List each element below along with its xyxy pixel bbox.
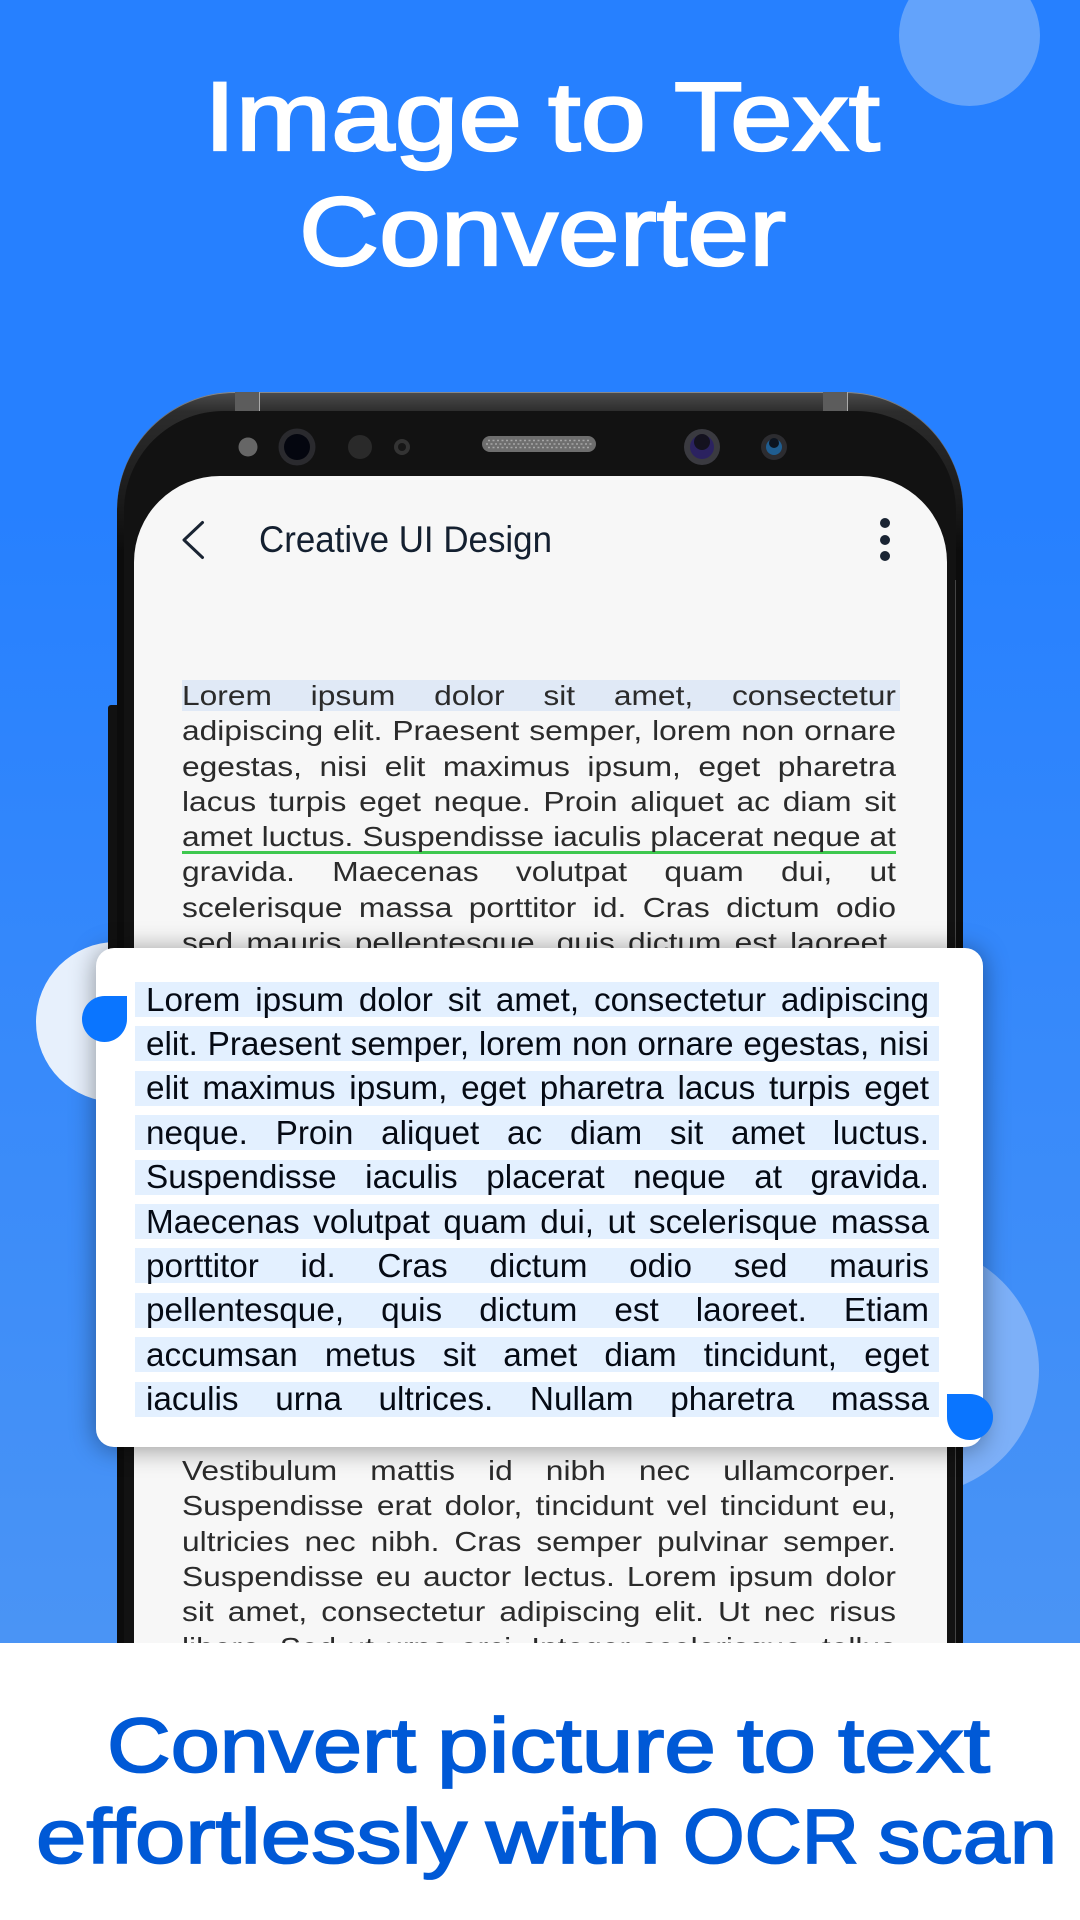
document text lower: libero. Sed ut urna orci. Integer scelerisque, tellus bbox=[182, 1632, 896, 1662]
extracted text: pellentesque, quis dictum est laoreet. Etiam bbox=[146, 1292, 929, 1329]
selection handle: bottom right bbox=[947, 1394, 993, 1440]
decorative circle: right behind card bbox=[789, 1245, 1039, 1495]
document text upper: gravida. Maecenas volutpat quam dui, ut bbox=[182, 856, 896, 887]
extracted text: accumsan metus sit amet diam tincidunt, eget bbox=[146, 1337, 929, 1374]
bottom caption: text bbox=[838, 1703, 990, 1789]
phone side button bbox=[108, 705, 122, 1005]
phone body bbox=[117, 392, 963, 1792]
document text upper: scelerisque massa porttitor id. Cras dictum odio bbox=[182, 892, 896, 922]
phone edge highlights bbox=[235, 392, 260, 412]
bottom caption: with bbox=[485, 1794, 661, 1880]
extracted text bbox=[146, 982, 929, 1418]
back chevron icon bbox=[182, 520, 204, 560]
title bbox=[204, 62, 880, 286]
document text upper: Lorem ipsum dolor sit amet, consectetur bbox=[182, 680, 896, 711]
bottom caption: scan bbox=[878, 1794, 1057, 1880]
document text upper: amet luctus. Suspendisse iaculis placerat neque at bbox=[182, 821, 896, 852]
bottom caption bbox=[36, 1703, 1057, 1880]
extracted text: iaculis urna ultrices. Nullam pharetra massa bbox=[146, 1381, 929, 1418]
document text upper: lacus turpis eget neque. Proin aliquet ac diam sit bbox=[182, 786, 896, 817]
extracted text: porttitor id. Cras dictum odio sed mauris bbox=[146, 1248, 929, 1285]
document text lower: Vestibulum mattis id nibh nec ullamcorper. bbox=[182, 1455, 896, 1486]
extracted text: Maecenas volutpat quam dui, ut scelerisque massa bbox=[146, 1204, 929, 1240]
document text upper: egestas, nisi elit maximus ipsum, eget pharetra bbox=[182, 751, 896, 782]
bottom caption: Convert bbox=[107, 1703, 416, 1789]
document text lower: Suspendisse erat dolor, tincidunt vel tincidunt eu, bbox=[182, 1490, 896, 1521]
decorative circle: top right bbox=[899, 0, 1040, 106]
more menu icon bbox=[880, 518, 890, 561]
camera sensors and speaker bbox=[238, 428, 787, 466]
bottom white band bbox=[0, 1643, 1080, 1920]
document text upper: sed mauris pellentesque, quis dictum est laoreet. bbox=[182, 927, 896, 958]
extracted text: elit. Praesent semper, lorem non ornare egestas, nisi bbox=[146, 1026, 929, 1063]
extracted text: Lorem ipsum dolor sit amet, consectetur adipiscing bbox=[146, 982, 929, 1018]
title: Text bbox=[674, 62, 880, 171]
selected line highlight bbox=[182, 680, 900, 711]
app bar title: Creative UI Design bbox=[259, 519, 552, 560]
extracted text: elit maximus ipsum, eget pharetra lacus turpis eget bbox=[146, 1070, 929, 1107]
document text lower bbox=[182, 1455, 896, 1662]
document text upper: adipiscing elit. Praesent semper, lorem non ornare bbox=[182, 715, 896, 746]
phone inner bezel bbox=[124, 411, 956, 1711]
extracted text: Suspendisse iaculis placerat neque at gravida. bbox=[146, 1159, 929, 1196]
bottom caption: picture bbox=[437, 1703, 716, 1789]
extracted text: neque. Proin aliquet ac diam sit amet luctus. bbox=[146, 1115, 929, 1152]
title: to bbox=[548, 62, 646, 171]
phone screen bbox=[134, 476, 947, 1776]
document text lower: sit amet, consectetur adipiscing elit. Ut nec risus bbox=[182, 1596, 896, 1627]
bottom caption: effortlessly bbox=[36, 1794, 468, 1880]
bottom caption: to bbox=[737, 1703, 816, 1789]
document text lower: ultricies nec nibh. Cras semper pulvinar semper. bbox=[182, 1526, 896, 1557]
scan underline bbox=[182, 851, 896, 854]
decorative circle: left behind card bbox=[36, 942, 196, 1102]
document text upper bbox=[182, 680, 896, 958]
document text lower: Suspendisse eu auctor lectus. Lorem ipsum dolor bbox=[182, 1561, 896, 1592]
highlight bars bbox=[135, 982, 939, 1417]
title: Image bbox=[204, 62, 522, 171]
bottom caption: OCR bbox=[683, 1794, 859, 1880]
phone edge line bbox=[955, 580, 956, 1643]
title: Converter bbox=[299, 177, 786, 286]
OCR result card bbox=[96, 948, 983, 1447]
selection handle: top left bbox=[82, 996, 127, 1042]
